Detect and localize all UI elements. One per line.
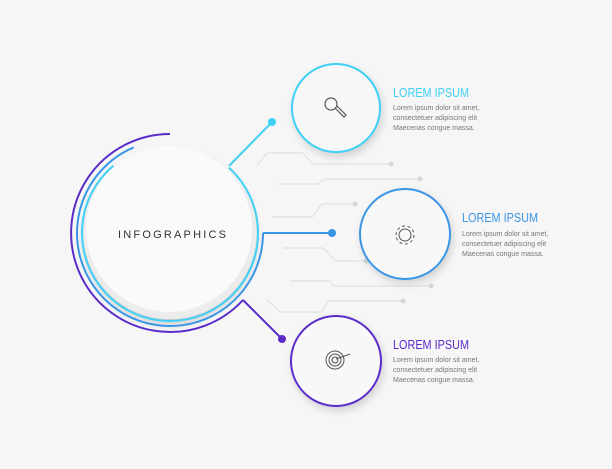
text 1: consectetuer adipiscing elit <box>393 115 477 122</box>
icon: gear <box>396 226 414 244</box>
icon: target <box>326 351 350 369</box>
node 1 <box>292 64 380 152</box>
text 2 <box>462 211 548 258</box>
text 3: LOREM IPSUM <box>393 338 469 352</box>
connector: purple <box>243 300 286 343</box>
text 3: Lorem ipsum dolor sit amet, <box>393 357 479 364</box>
icon: magnifier <box>325 98 346 117</box>
text 2: LOREM IPSUM <box>462 211 538 225</box>
node 2 <box>360 189 450 279</box>
text 1 <box>393 86 479 132</box>
rings <box>71 134 263 332</box>
connector: blue <box>263 229 336 237</box>
text 3: consectetuer adipiscing elit <box>393 367 477 374</box>
text 3 <box>393 338 479 384</box>
text 2: Maecenas congue massa. <box>462 251 544 258</box>
text 1: LOREM IPSUM <box>393 86 469 100</box>
node 3 <box>291 316 381 406</box>
title: INFOGRAPHICS <box>118 229 226 241</box>
text 3: Maecenas congue massa. <box>393 377 475 384</box>
main circle <box>84 146 256 319</box>
text 1: Lorem ipsum dolor sit amet, <box>393 105 479 112</box>
text 2: consectetuer adipiscing elit <box>462 241 546 248</box>
text 2: Lorem ipsum dolor sit amet, <box>462 231 548 238</box>
connector: cyan <box>229 118 276 166</box>
text 1: Maecenas congue massa. <box>393 125 475 132</box>
